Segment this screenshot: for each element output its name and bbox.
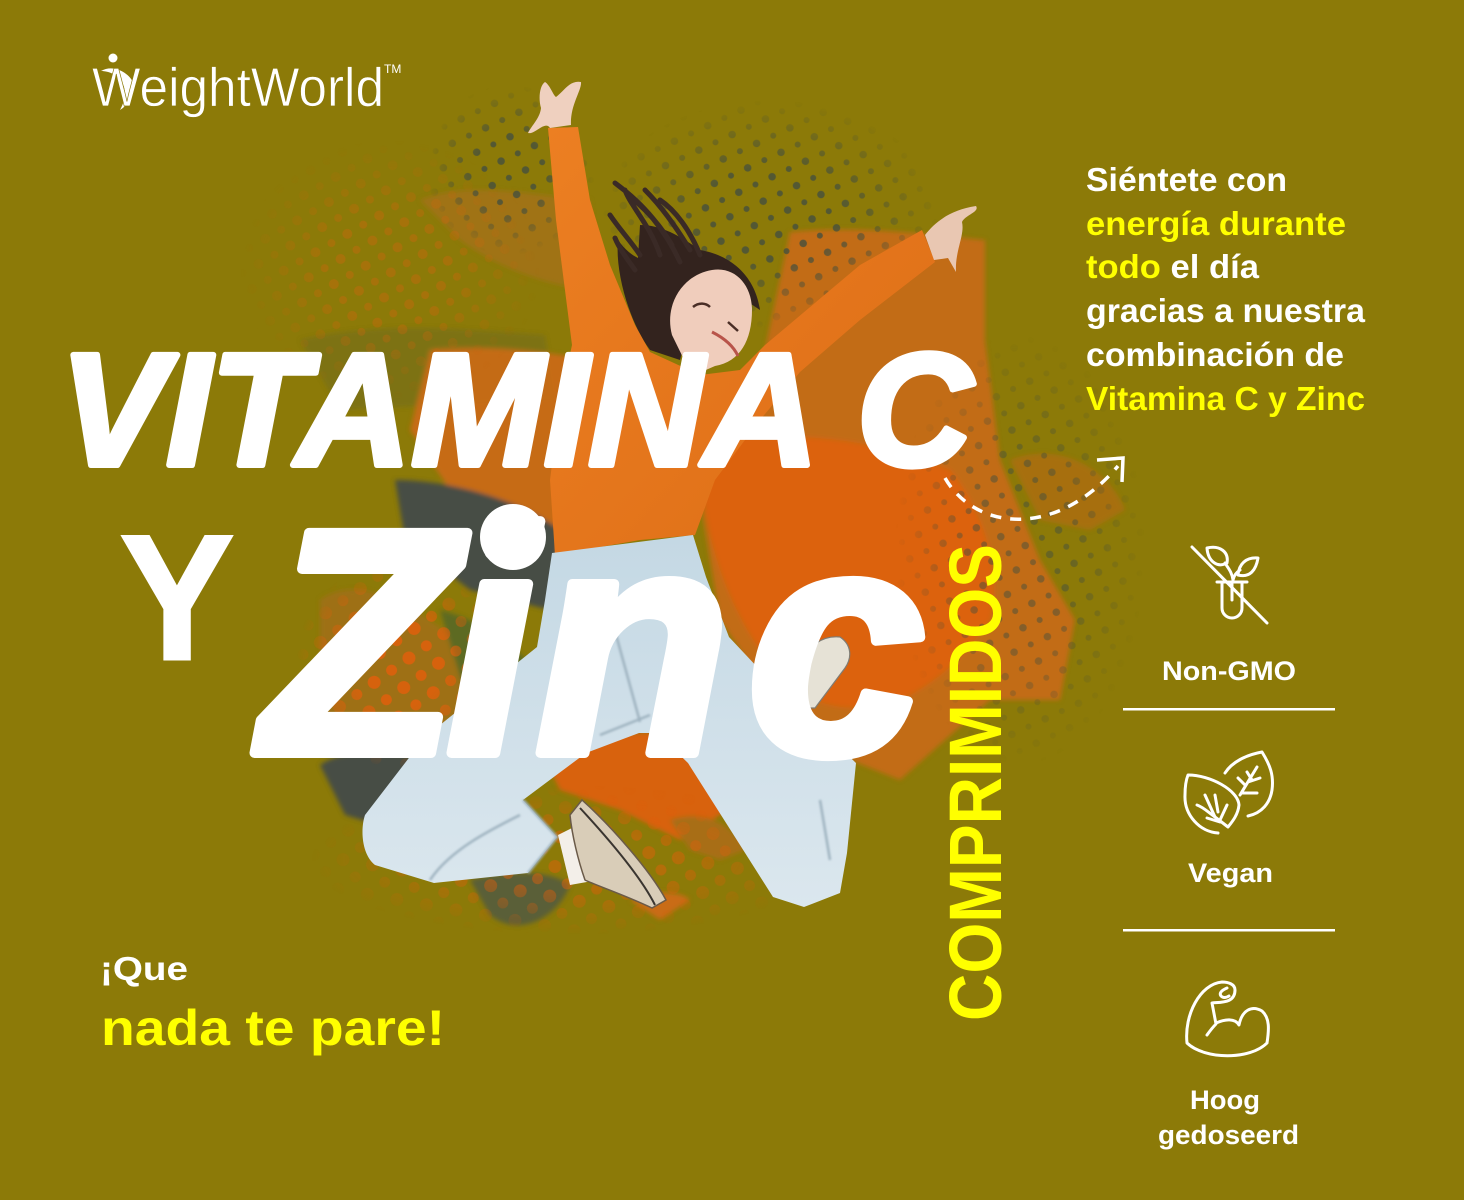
divider	[1123, 929, 1335, 932]
raised right hand	[925, 206, 977, 272]
tagline: ¡Que	[100, 950, 188, 987]
side description text: todo el día	[1086, 248, 1260, 285]
dashed arrow	[945, 458, 1123, 519]
title: Zinc: c	[747, 463, 925, 821]
upper shoe	[795, 637, 850, 708]
label: Hoog gedoseerd	[1158, 1085, 1299, 1150]
raised left hand	[528, 82, 581, 133]
lower shoe	[570, 800, 666, 908]
icon: muscle arm	[1187, 982, 1268, 1056]
logo: WeightWorld: WeightWorld	[92, 56, 384, 118]
hair	[610, 183, 760, 360]
title: Zinc: n	[535, 463, 730, 821]
label: Hoog gedoseerd: Hoog	[1190, 1085, 1260, 1115]
side description text: combinación de	[1086, 336, 1344, 373]
ankle and sock	[558, 825, 598, 885]
tagline: nada te pare!	[101, 1000, 445, 1056]
jeans	[362, 535, 856, 907]
side description text: Siéntete con	[1086, 161, 1287, 198]
side description text: gracias a nuestra	[1086, 292, 1366, 329]
title: Zinc: i	[446, 463, 541, 821]
title: Zinc	[252, 463, 925, 821]
title: VITAMINA C: VITAMINA C	[60, 320, 974, 499]
label: Vegan: Vegan	[1188, 858, 1273, 888]
side description text: energía durante	[1086, 205, 1346, 242]
label: Hoog gedoseerd: gedoseerd	[1158, 1120, 1299, 1150]
tagline	[100, 950, 445, 1056]
round dot of the i	[480, 504, 546, 570]
divider	[1123, 708, 1335, 710]
side description text: Vitamina C y Zinc	[1086, 380, 1365, 417]
orange top with sleeves	[548, 127, 935, 555]
icon: non-GMO	[1192, 547, 1267, 623]
side description text	[1086, 161, 1366, 417]
logo: WeightWorld: TM	[384, 62, 401, 76]
logo figure mark	[101, 68, 134, 110]
face and neck	[670, 269, 752, 376]
title: Zinc: Z	[252, 463, 472, 821]
icon: vegan leaves	[1185, 752, 1273, 833]
paint splatter and halftone backdrop	[270, 93, 1129, 928]
label: Non-GMO: Non-GMO	[1162, 656, 1296, 686]
title: Y: Y	[120, 498, 234, 697]
jumping woman	[362, 82, 977, 908]
vertical label: COMPRIMIDOS: COMPRIMIDOS	[934, 544, 1017, 1021]
